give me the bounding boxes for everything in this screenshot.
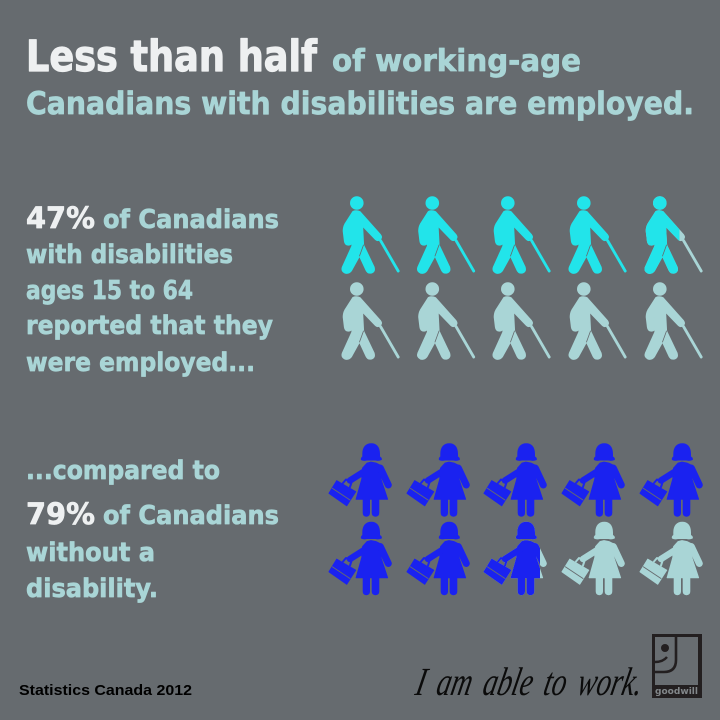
- logo: goodwill: goodwill: [655, 687, 698, 697]
- text block: people without a disability: ...compared to: [26, 456, 220, 486]
- text block: people with disabilities: of Canadians: [103, 205, 279, 235]
- text block: people with disabilities: with disabilities: [26, 240, 233, 270]
- text block: people with disabilities: [26, 201, 279, 378]
- title: [26, 32, 694, 122]
- title: of working-age: [332, 44, 581, 79]
- text block: people without a disability: without a: [26, 538, 155, 568]
- text block: people without a disability: disability.: [26, 574, 158, 604]
- text block: people with disabilities: reported that they: [26, 311, 273, 341]
- text block: people with disabilities: were employed...: [26, 348, 255, 378]
- logo: goodwill: [652, 634, 702, 698]
- pictogram: 79 percent women with briefcases: [329, 443, 699, 595]
- text block: people without a disability: of Canadians: [103, 501, 279, 531]
- text block: people without a disability: [26, 456, 279, 604]
- text block: people with disabilities: ages 15 to 64: [26, 276, 193, 306]
- pictogram: 47 percent walkers: [342, 196, 701, 359]
- text block: people with disabilities: 47%: [26, 201, 95, 235]
- source: Statistics Canada 2012: [19, 682, 192, 699]
- text block: people without a disability: 79%: [26, 497, 95, 531]
- title: Less than half: [26, 32, 318, 82]
